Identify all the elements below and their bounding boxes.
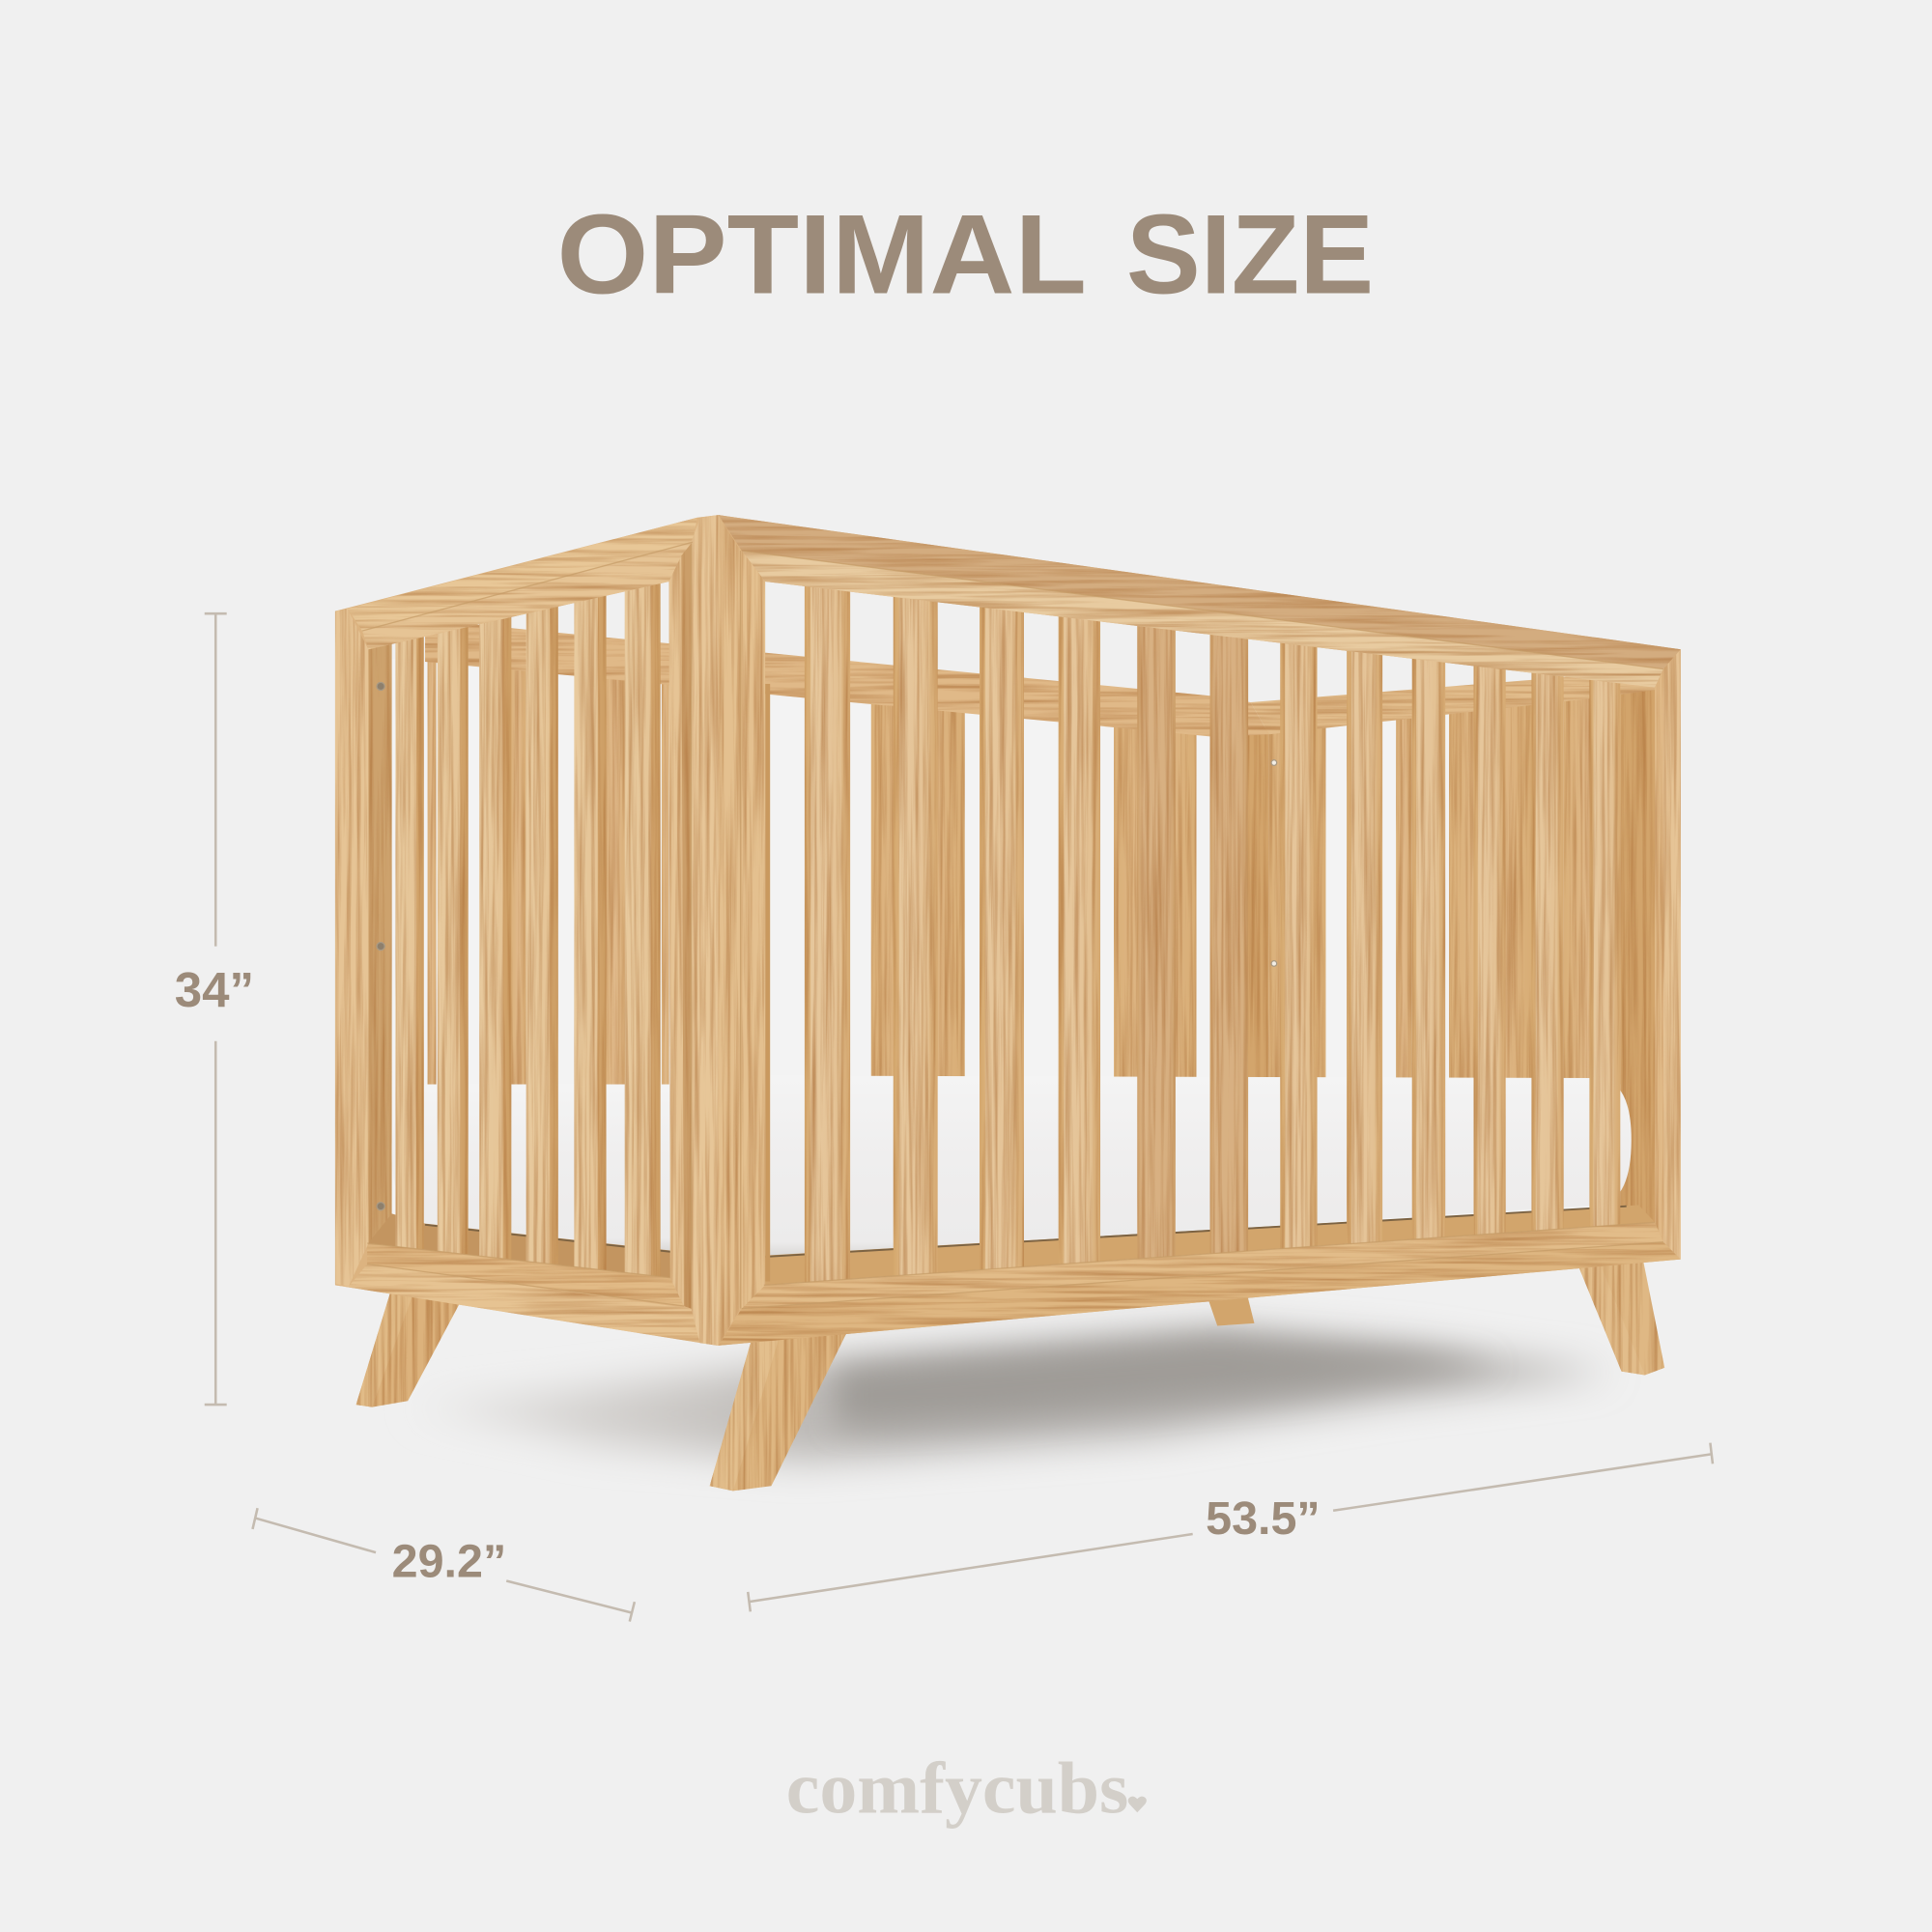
post: left facet [692, 515, 719, 1346]
stile: long side left molding [742, 551, 765, 1309]
screws [377, 682, 1277, 1210]
rail: short side top [348, 518, 697, 631]
frame: vertical stiles [335, 515, 1681, 1346]
icon: heart [1128, 1797, 1147, 1812]
molding: short side bottom [367, 1243, 684, 1306]
stile: far left [335, 609, 368, 1287]
crib [335, 515, 1681, 1491]
mattress [392, 1076, 1632, 1257]
label: width: 53.5” [1206, 1492, 1321, 1545]
dimension: width [748, 1443, 1713, 1611]
stile: short side right molding [669, 555, 684, 1306]
inner edge of post [765, 684, 770, 1282]
logo [786, 1747, 1147, 1829]
view through crib [370, 659, 1655, 1285]
stile: far right [1663, 649, 1681, 1260]
post: right facet [719, 515, 741, 1346]
leg: front [710, 1331, 848, 1491]
molding: short side top [362, 542, 693, 649]
molding: long side bottom [742, 1222, 1663, 1309]
legs [356, 1257, 1664, 1491]
dimension: depth [252, 1508, 635, 1622]
leg: left [356, 1288, 461, 1407]
frame: horizontal rails [335, 515, 1681, 1346]
title: SIZE [1126, 191, 1374, 318]
label: height: 34” [175, 962, 254, 1017]
back rails [425, 620, 1655, 737]
back leg [1207, 1293, 1254, 1325]
molding: long side top [742, 551, 1663, 688]
dimension: height [175, 613, 254, 1405]
bed rails [367, 1205, 1655, 1285]
floor shadow [412, 1328, 1614, 1462]
rail: short side bottom [335, 1264, 717, 1346]
slats: long side [805, 573, 1620, 1288]
slats: short side [395, 579, 661, 1284]
leg: right [1577, 1257, 1664, 1375]
frame base [335, 515, 1681, 1346]
rail: long side top [719, 515, 1681, 669]
title: OPTIMAL [557, 191, 1087, 318]
back slats [428, 640, 1655, 1226]
logo wordmark: comfycubs [786, 1747, 1128, 1829]
left inner post [367, 640, 392, 1244]
rail: long side bottom [719, 1242, 1681, 1346]
label: depth: 29.2” [392, 1536, 506, 1588]
frame grooves [362, 542, 1663, 1309]
stile: short side dark edge [681, 543, 692, 1309]
stile: far right molding [1655, 669, 1663, 1242]
